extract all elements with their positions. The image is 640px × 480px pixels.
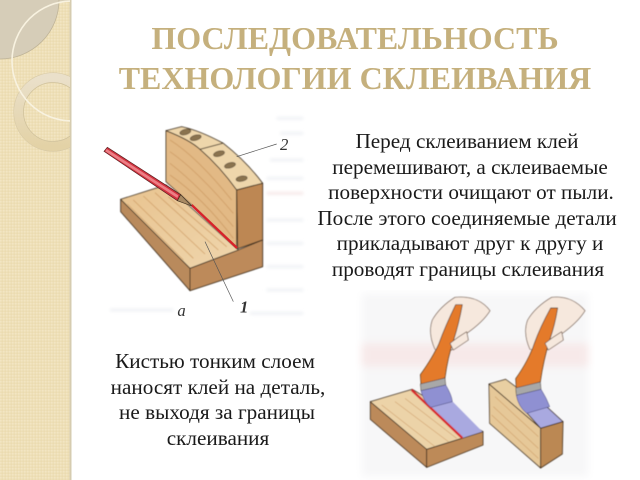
illustration: applying glue with brush <box>360 296 590 470</box>
callout labels: 1 <box>240 298 248 317</box>
text block: preparation: Перед склеиванием клей <box>355 129 579 153</box>
lower board: left face <box>121 199 190 291</box>
text block: preparation: проводят границы склеивания <box>332 257 604 281</box>
text block: applying glue: Кистью тонким слоем <box>115 349 315 373</box>
right board with glue <box>489 379 563 468</box>
upright board: side face <box>166 131 237 247</box>
text block: applying glue: не выходя за границы <box>119 400 315 424</box>
callout labels: 2 <box>280 135 288 154</box>
upright board: end grain top <box>166 127 263 190</box>
text block: preparation <box>317 129 617 281</box>
right hand and brush <box>516 297 585 413</box>
callout labels <box>177 135 288 320</box>
lower board: front face <box>190 240 263 291</box>
title: ТЕХНОЛОГИИ СКЛЕИВАНИЯ <box>119 60 591 96</box>
illustration: pencil marking glue boundary on wooden parts <box>104 118 303 320</box>
pencil <box>104 147 192 206</box>
title <box>119 20 591 96</box>
left hand and brush <box>420 297 490 407</box>
text block: applying glue <box>111 349 325 450</box>
leader lines <box>205 144 277 302</box>
red boundary line <box>192 205 237 248</box>
text block: preparation: поверхности очищают от пыли. <box>328 180 614 204</box>
lower board: top face <box>121 185 238 268</box>
text block: preparation: перемешивают, а склеиваемые <box>332 155 608 179</box>
decorative sidebar <box>0 0 72 480</box>
upright board: end face <box>237 183 263 249</box>
left board with glue <box>370 389 483 467</box>
callout labels: а <box>177 301 186 320</box>
text block: preparation: прикладывают друг к другу и <box>337 231 603 255</box>
text block: applying glue: наносят клей на деталь, <box>111 375 325 399</box>
text block: preparation: После этого соединяемые детали <box>317 206 617 230</box>
text block: applying glue: склеивания <box>167 426 269 450</box>
title: ПОСЛЕДОВАТЕЛЬНОСТЬ <box>151 20 559 56</box>
